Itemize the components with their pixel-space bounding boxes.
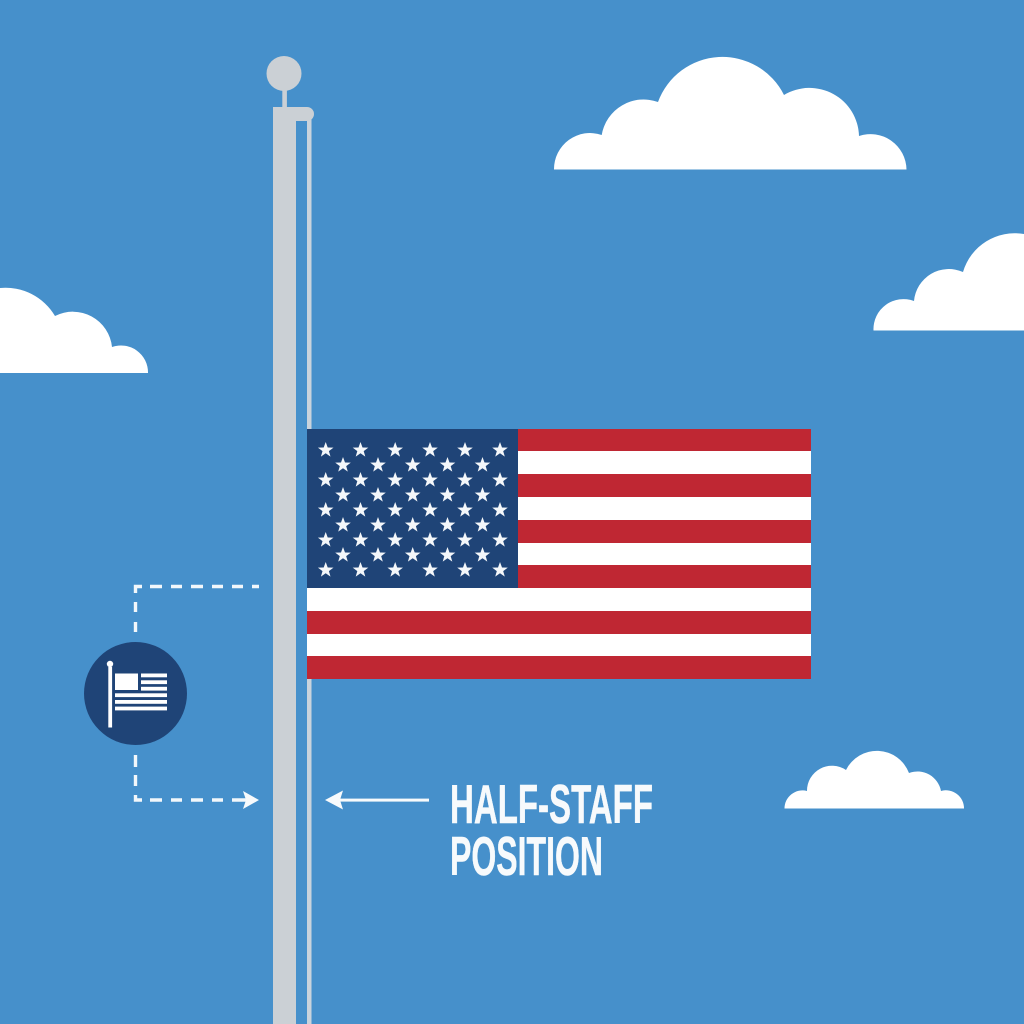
dashed connector: icon up to top of pole marker	[136, 586, 259, 632]
flagpole	[266, 56, 314, 1024]
blue canton	[307, 429, 518, 588]
stars	[318, 442, 508, 577]
cloud: left	[0, 288, 148, 373]
red stripes	[307, 429, 811, 679]
label: half-staff position	[450, 773, 653, 887]
cloud: bottom right	[784, 751, 964, 808]
label: half-staff position: POSITION	[450, 825, 603, 887]
label: half-staff position: HALF-STAFF	[450, 773, 653, 835]
US flag at half-staff	[307, 429, 811, 679]
dashed connector: icon down to half-staff arrow	[136, 755, 259, 809]
cloud: right	[873, 233, 1024, 330]
pole finial ball	[266, 56, 302, 91]
cloud: top right large	[554, 57, 906, 170]
icon: circular flag badge	[84, 642, 187, 745]
halyard rope	[307, 118, 312, 1024]
pole shaft and arm	[273, 107, 314, 1024]
arrow pointing to pole	[325, 790, 429, 810]
